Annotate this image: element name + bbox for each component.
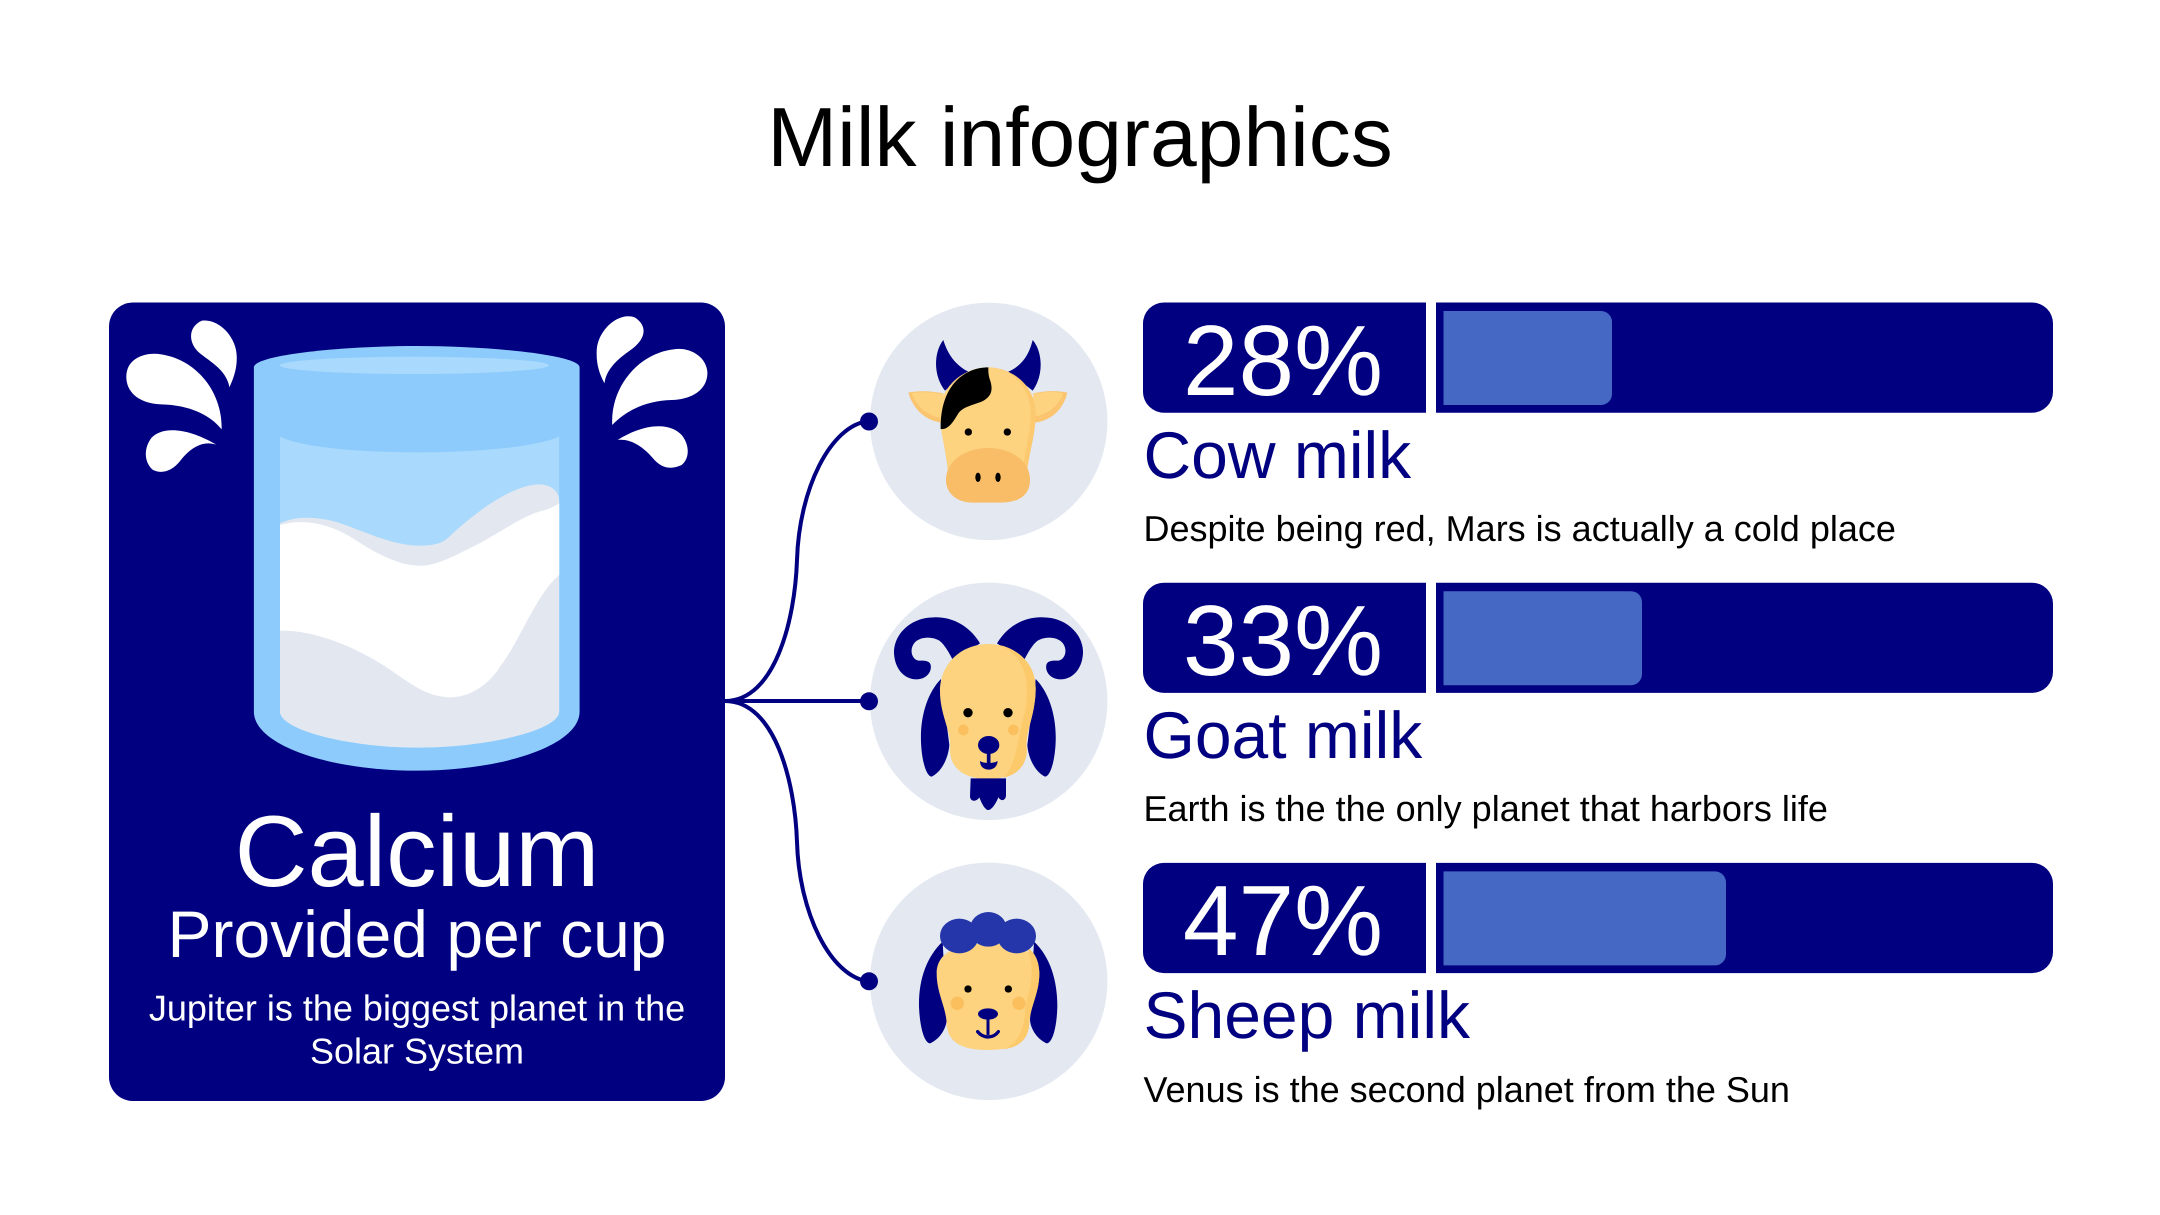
percentage box xyxy=(1143,863,1426,973)
percentage box xyxy=(1143,302,1426,413)
panel description: Solar System xyxy=(310,1031,524,1072)
description: Earth is the the only planet that harbors life xyxy=(1144,788,1828,829)
label: Goat milk xyxy=(1144,698,1423,772)
value: 47% xyxy=(1183,865,1383,977)
description: Venus is the second planet from the Sun xyxy=(1144,1069,1790,1110)
subheading: Provided per cup xyxy=(168,897,666,971)
icon: cow xyxy=(860,303,1107,540)
bar track xyxy=(1436,583,2053,693)
label: Sheep milk xyxy=(1144,978,1471,1052)
illustration: glass of milk xyxy=(126,316,707,771)
milk splashes right xyxy=(597,316,707,468)
bar fill 28% xyxy=(1444,311,1612,405)
title: Milk infographics xyxy=(767,90,1393,184)
glass body xyxy=(254,346,580,771)
panel description: Jupiter is the biggest planet in the xyxy=(149,988,685,1029)
value: 28% xyxy=(1183,305,1383,417)
glass interior xyxy=(280,437,559,748)
description: Despite being red, Mars is actually a cold place xyxy=(1144,508,1896,549)
value: 33% xyxy=(1183,585,1383,697)
row: cow milk xyxy=(1143,302,2053,549)
row: sheep milk xyxy=(1143,863,2053,1110)
panel background xyxy=(109,302,725,1101)
heading: Calcium: Calcium xyxy=(235,796,599,908)
milk shadow xyxy=(280,484,559,748)
row: goat milk xyxy=(1143,583,2053,829)
bar fill 47% xyxy=(1444,871,1726,965)
bar fill 33% xyxy=(1444,591,1642,685)
bar track xyxy=(1436,302,2053,413)
glass rim xyxy=(280,357,549,374)
percentage box xyxy=(1143,583,1426,693)
milk splashes left xyxy=(126,320,237,472)
connectors xyxy=(725,421,869,982)
label: Cow milk xyxy=(1144,418,1412,492)
icon: sheep xyxy=(860,863,1107,1100)
milk highlight xyxy=(280,503,559,697)
bar track xyxy=(1436,863,2053,973)
icon: goat xyxy=(860,583,1107,820)
panel: calcium xyxy=(109,302,725,1101)
